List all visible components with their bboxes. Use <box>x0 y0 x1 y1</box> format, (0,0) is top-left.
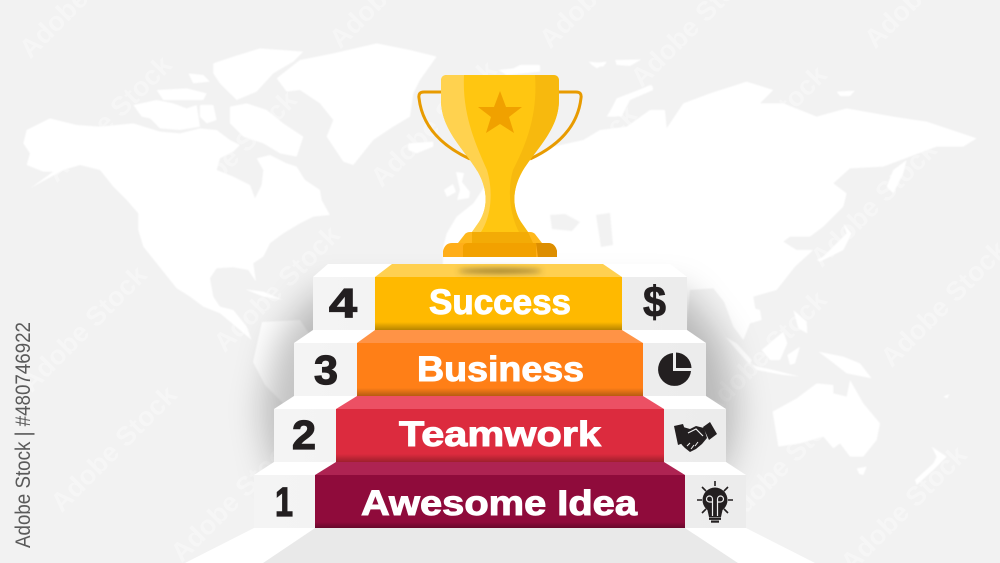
stock id label: Adobe Stock | #480746922 <box>12 322 35 548</box>
step numbers <box>275 280 357 525</box>
step 3 business: Business <box>417 350 584 389</box>
icon: handshake <box>674 422 717 452</box>
trophy <box>419 75 581 274</box>
step 1 awesome idea <box>315 462 685 528</box>
trophy cup highlight <box>441 75 491 232</box>
watermark: Adobe Stock <box>365 54 503 193</box>
step 2 teamwork: Teamwork <box>399 415 602 454</box>
trophy shadow <box>458 268 542 274</box>
step 4 white block <box>313 264 687 330</box>
watermark: Adobe Stock <box>695 59 833 198</box>
white stairs <box>254 264 746 528</box>
map seas <box>550 213 613 247</box>
step 2 white block <box>274 396 726 462</box>
step 1 awesome idea: Awesome Idea <box>361 484 638 523</box>
iceland and arctic islands <box>498 59 653 117</box>
watermark: Adobe Stock <box>715 394 853 533</box>
trophy star <box>478 91 522 133</box>
north america <box>23 48 330 340</box>
world map <box>23 43 977 485</box>
watermark: Adobe Stock <box>15 259 153 398</box>
watermark: Adobe Stock <box>505 99 643 238</box>
trophy cup <box>441 75 559 232</box>
watermark: Adobe Stock <box>165 84 303 223</box>
south america <box>253 320 320 420</box>
stairs shadow <box>262 290 738 475</box>
watermark: Adobe Stock <box>45 379 183 518</box>
icon: pie chart <box>658 352 692 386</box>
step numbers: 3 <box>314 347 338 393</box>
uk and ireland <box>444 172 470 200</box>
step 4 success: Success <box>429 283 571 322</box>
step 1 white block <box>254 462 746 528</box>
step numbers: 2 <box>292 412 316 458</box>
step numbers: 4 <box>329 280 357 326</box>
trophy cup shade <box>510 75 559 232</box>
step 2 teamwork <box>336 396 664 462</box>
trophy handles <box>419 92 581 159</box>
step 3 white block <box>294 330 706 396</box>
icon: light bulb <box>697 481 733 523</box>
step numbers: 1 <box>275 479 293 525</box>
watermark: Adobe Stock <box>695 284 833 423</box>
oceania <box>723 300 949 485</box>
trophy base <box>443 232 557 257</box>
icon: dollar: $ <box>643 278 666 327</box>
watermark: Adobe Stock <box>805 134 943 273</box>
eurasia and africa <box>440 62 977 360</box>
greenland <box>277 43 437 165</box>
watermark: Adobe Stock <box>40 49 178 188</box>
floor <box>185 528 815 563</box>
step 3 business <box>357 330 643 396</box>
step 4 success <box>375 264 622 330</box>
watermark: Adobe Stock <box>208 219 346 358</box>
